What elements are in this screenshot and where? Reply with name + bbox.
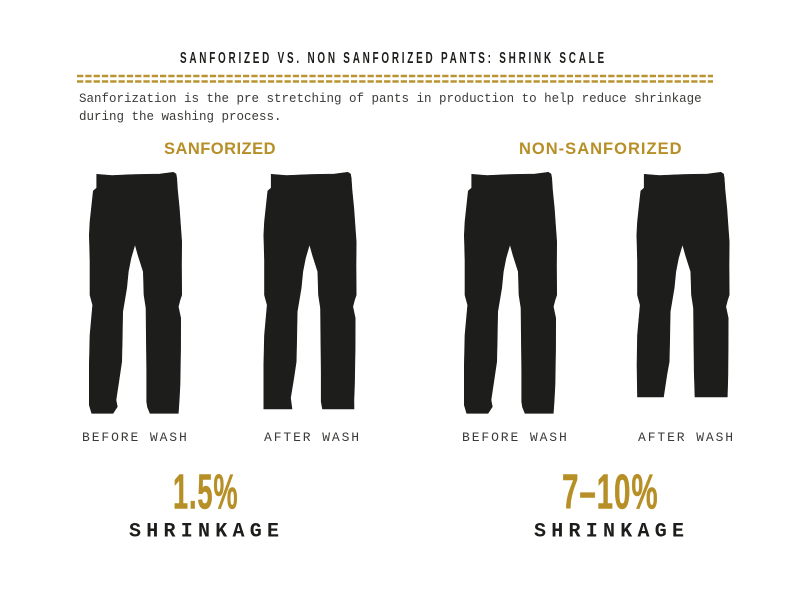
heading: non-sanforized: NON-SANFORIZED: [519, 140, 682, 158]
caption: before wash (non-sanforized): BEFORE WASH: [462, 430, 569, 445]
intro text: Sanforization is the pre stretching of pants in production to help reduce shrinkage: [79, 92, 702, 106]
intro text: during the washing process.: [79, 110, 282, 124]
icon: non-sanforized pants after wash: [637, 172, 729, 397]
label: shrinkage (sanforized): SHRINKAGE: [129, 520, 284, 544]
stat: 7-10%: 7–10%: [562, 464, 658, 520]
caption: after wash (non-sanforized): AFTER WASH: [638, 430, 735, 445]
caption: after wash (sanforized): AFTER WASH: [264, 430, 361, 445]
caption: before wash (sanforized): BEFORE WASH: [82, 430, 189, 445]
icon: sanforized pants after wash: [264, 172, 356, 409]
title: SANFORIZED VS. NON SANFORIZED PANTS: SHRINK SCALE: [180, 49, 604, 67]
icon: sanforized pants before wash: [89, 172, 182, 413]
intro text: [79, 92, 702, 124]
double dashed gold rule: [77, 76, 713, 82]
label: shrinkage (non-sanforized): SHRINKAGE: [534, 520, 689, 544]
heading: sanforized: SANFORIZED: [164, 140, 276, 158]
icon: non-sanforized pants before wash: [464, 172, 557, 413]
stat: 1.5%: 1.5%: [173, 464, 238, 520]
